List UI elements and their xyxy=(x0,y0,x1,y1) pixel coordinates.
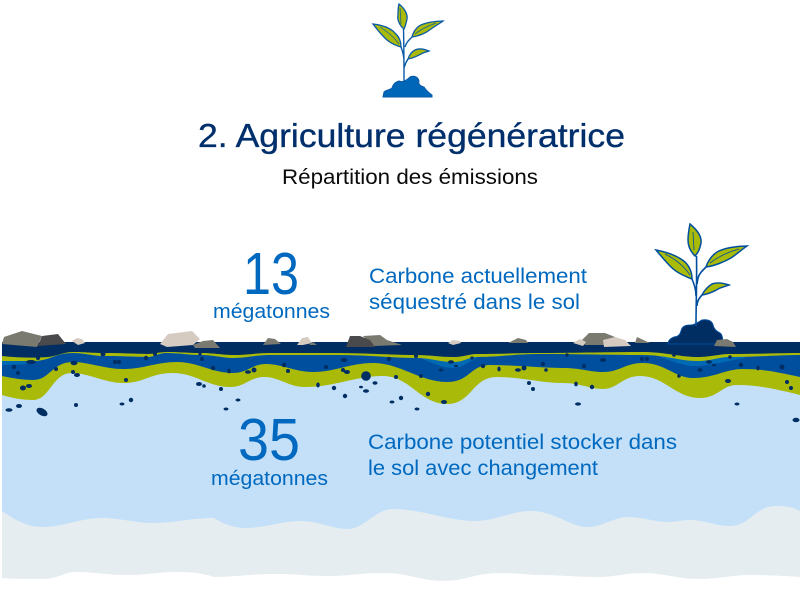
stat: 35 mégatonnes: 35 xyxy=(238,407,300,473)
layer: bright blue patches xyxy=(2,352,745,368)
layer: subsoil light blue xyxy=(2,365,800,530)
title: 2. Agriculture régénératrice xyxy=(198,117,625,154)
layer: green soil xyxy=(2,345,800,404)
text: potential carbon storage xyxy=(368,431,677,480)
stat: 13 mégatonnes: mégatonnes xyxy=(213,301,330,323)
layer: pale bedrock xyxy=(2,506,800,581)
icon: large plant with dark mound xyxy=(656,224,747,347)
text: carbon currently sequestered: séquestré dans le sol xyxy=(369,291,580,314)
layer: dark topsoil xyxy=(2,342,800,358)
text: potential carbon storage: le sol avec changement xyxy=(368,457,598,480)
stat: 13 mégatonnes xyxy=(213,241,330,323)
text: carbon currently sequestered: Carbone actuellement xyxy=(369,265,587,288)
rocks on the surface xyxy=(2,331,650,348)
layer: thin green band xyxy=(2,345,800,362)
stat: 35 mégatonnes xyxy=(211,407,328,490)
stat: 35 mégatonnes: mégatonnes xyxy=(211,468,328,490)
text: carbon currently sequestered xyxy=(369,265,587,314)
soil particles xyxy=(6,352,800,422)
stat: 13 mégatonnes: 13 xyxy=(243,241,299,307)
soil cross-section xyxy=(2,342,800,581)
icon: small plant xyxy=(373,4,443,97)
layer: blue soil xyxy=(2,345,800,382)
text: potential carbon storage: Carbone potentiel stocker dans xyxy=(368,431,677,454)
subtitle: Répartition des émissions xyxy=(282,166,538,189)
